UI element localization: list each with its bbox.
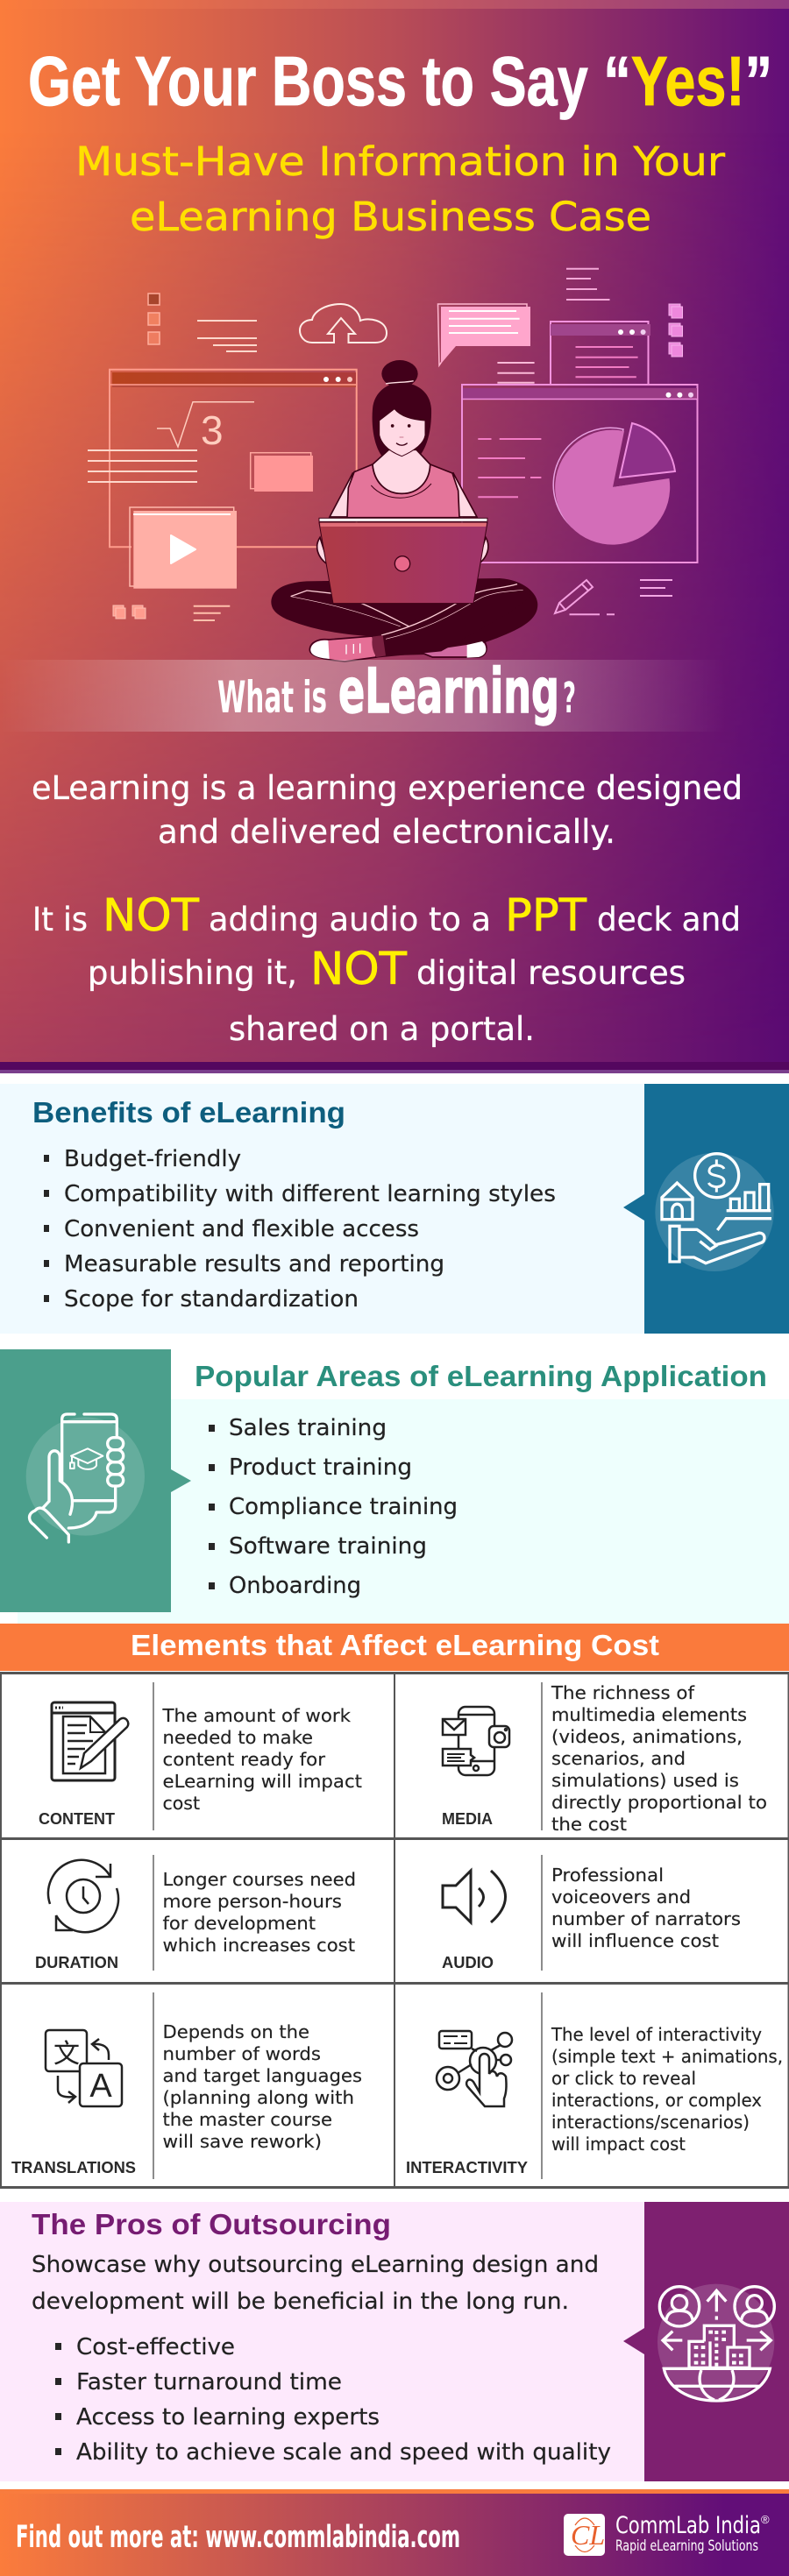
bullet list: Convenient and flexible access (64, 1216, 419, 1242)
cell: media: simulations) used is (551, 1770, 739, 1791)
icon: checklist squares (148, 294, 160, 344)
text block: definition: and delivered electronically. (158, 812, 615, 851)
cell: interactivity: The level of interactivity (551, 2024, 762, 2045)
math formula: square root of 3 (157, 402, 254, 453)
icon: speech bubble (438, 304, 530, 365)
text lines middle (497, 363, 535, 383)
math formula: square root of 3: 3 (201, 407, 224, 453)
cell: media (442, 1682, 767, 1835)
bullet list: Cost-effective (76, 2334, 235, 2360)
cell: translations: and target languages (163, 2065, 362, 2086)
face (380, 409, 425, 456)
subtitle: eLearning Business Case (130, 194, 651, 240)
subtitle: Must-Have Information in Your (75, 138, 726, 185)
text block: what eLearning is not: deck and (597, 900, 741, 938)
cost elements grid (0, 1672, 789, 2189)
illustration: woman with laptop and learning windows (88, 269, 698, 662)
icon: global offices and people (658, 2284, 774, 2401)
cell: audio: Professional (551, 1865, 664, 1886)
subtitle (75, 138, 726, 240)
cell: interactivity: or click to reveal (551, 2068, 696, 2089)
woman figure (271, 360, 537, 662)
text lines bottom left (194, 606, 230, 620)
cell: translations: will save rework) (163, 2131, 322, 2152)
bullet list: Software training (229, 1533, 427, 1560)
text block: what eLearning is not: NOT (310, 944, 408, 995)
bullet list: Product training (229, 1454, 412, 1481)
text lines left top (197, 321, 257, 351)
bullet list: Sales training (229, 1415, 387, 1441)
cell: translations: the master course (163, 2109, 332, 2130)
cell: media: (videos, animations, (551, 1726, 743, 1747)
bullet list (209, 1415, 458, 1599)
cell: audio: voiceovers and (551, 1886, 691, 1907)
icon: hand touching network (437, 2031, 512, 2106)
laptop (319, 518, 487, 604)
large window with pie chart (462, 385, 698, 563)
leg stripes (381, 584, 517, 635)
bullet list: Access to learning experts (76, 2404, 380, 2431)
paragraph (32, 2252, 599, 2315)
neck and chest (373, 449, 430, 493)
panel: popular areas of eLearning application (0, 1349, 789, 1624)
icon: language translation: A (89, 2068, 112, 2105)
icon: speaker (443, 1871, 505, 1922)
right foot (418, 641, 487, 658)
text lines bottom right (640, 580, 672, 596)
cell: translations: Depends on the (163, 2021, 309, 2042)
cell: media: MEDIA (442, 1810, 493, 1828)
cell: content: The amount of work (161, 1705, 351, 1726)
hair back (373, 360, 431, 457)
cell: media: directly proportional to (551, 1792, 767, 1813)
text block: what eLearning is not: NOT (103, 890, 200, 942)
icon: document and pencil (52, 1702, 128, 1780)
bullet list: Onboarding (229, 1573, 361, 1599)
heading band: What is eLearning?: What is (217, 672, 327, 723)
cell: interactivity (406, 2024, 783, 2176)
icon: clock with cycle arrows (48, 1860, 118, 1932)
icon: language translation (46, 2030, 122, 2106)
icon: hand holding phone with graduation cap (26, 1414, 145, 1542)
bullet list (55, 2334, 611, 2466)
bullet list: Ability to achieve scale and speed with quality (76, 2439, 611, 2466)
cell: content: CONTENT (39, 1810, 115, 1828)
logo: CommLab India: ® (761, 2513, 770, 2526)
logo: CommLab India: CL (571, 2519, 605, 2551)
left window (110, 370, 357, 547)
panel: the pros of outsourcing (0, 2202, 789, 2481)
heading: Popular Areas of eLearning Application (195, 1361, 767, 1393)
banner: elements that affect eLearning cost: Elements that Affect eLearning Cost (131, 1630, 659, 1662)
text lines above small window (566, 269, 610, 300)
heading band: What is eLearning?: eLearning (338, 655, 559, 727)
cell: audio (442, 1865, 741, 1971)
cell: translations (11, 2021, 362, 2176)
crossed leg (374, 584, 532, 658)
cell: content: cost (163, 1793, 200, 1814)
icon: language translation: 文 (53, 2032, 80, 2070)
arms (330, 472, 477, 517)
hero panel: gradient background (0, 0, 789, 1073)
cell: content: eLearning will impact (163, 1771, 362, 1792)
heading: Benefits of eLearning (32, 1097, 345, 1129)
pie chart (553, 423, 675, 545)
tank top (347, 464, 459, 518)
shoe (309, 635, 386, 662)
cell: interactivity: will impact cost (551, 2134, 686, 2155)
text block: what eLearning is not: publishing it, (88, 953, 297, 992)
text block: what eLearning is not: PPT (505, 890, 587, 942)
banner: elements that affect eLearning cost (0, 1624, 789, 1671)
text lines in left window (88, 450, 197, 482)
cell: content (39, 1702, 362, 1828)
bullet list: Budget-friendly (64, 1146, 241, 1172)
paragraph: Showcase why outsourcing eLearning design and (32, 2252, 599, 2278)
pink square (251, 453, 313, 492)
bullet list: Compliance training (229, 1494, 458, 1520)
small window (551, 322, 650, 385)
cell: content: content ready for (163, 1749, 326, 1770)
bullet list: Measurable results and reporting (64, 1251, 444, 1277)
icon: document stack (669, 304, 682, 357)
cell: interactivity: (simple text + animations, (551, 2046, 783, 2067)
icon: phone with media (443, 1707, 509, 1775)
cell: content: needed to make (163, 1727, 313, 1748)
cell: media: scenarios, and (551, 1748, 686, 1769)
icon: pencil (555, 580, 615, 614)
text block: what eLearning is not: digital resources (416, 953, 686, 992)
cell: translations: TRANSLATIONS (11, 2159, 136, 2176)
cell: interactivity: interactions, or complex (551, 2090, 762, 2111)
cell: audio: AUDIO (442, 1954, 494, 1971)
panel: benefits of eLearning (0, 1084, 789, 1334)
bullet list (44, 1146, 556, 1313)
text block: what eLearning is not: It is (32, 900, 88, 938)
cell: media: the cost (551, 1814, 627, 1835)
title: Get Your Boss to Say “Yes!” (28, 42, 772, 120)
cell: interactivity: INTERACTIVITY (406, 2159, 528, 2176)
icon: cloud upload (300, 304, 387, 343)
cell: translations: number of words (163, 2043, 321, 2064)
heading band: What is eLearning? (0, 655, 789, 732)
text block: what eLearning is not: shared on a portal. (229, 1009, 535, 1048)
cell: media: multimedia elements (551, 1704, 747, 1725)
cell: duration: which increases cost (163, 1935, 355, 1956)
cell: duration: DURATION (35, 1954, 118, 1971)
heading band: What is eLearning?: ? (563, 674, 576, 723)
cell: audio: number of narrators (551, 1908, 741, 1929)
bullet list: Scope for standardization (64, 1286, 359, 1313)
icon: hand holding money, house and chart (655, 1153, 774, 1271)
paragraph: development will be beneficial in the long run. (32, 2289, 569, 2315)
cell: duration: for development (163, 1913, 316, 1934)
text block: definition: eLearning is a learning experience designed (32, 768, 743, 807)
cell: duration: Longer courses need (163, 1869, 356, 1890)
cell: duration (35, 1860, 356, 1971)
footer (0, 2489, 789, 2576)
text block: what eLearning is not (32, 890, 741, 1048)
heading: The Pros of Outsourcing (32, 2209, 391, 2241)
bullet list: Compatibility with different learning styles (64, 1181, 556, 1207)
icon: small documents (113, 605, 146, 619)
icon: video player (130, 507, 237, 589)
cell: duration: more person-hours (163, 1891, 342, 1912)
cell: translations: (planning along with (163, 2087, 354, 2108)
pointer arrow (171, 1469, 191, 1492)
cell: interactivity: interactions/scenarios) (551, 2112, 750, 2133)
legs (271, 578, 537, 655)
cell: media: The richness of (551, 1682, 695, 1703)
text block: definition (32, 768, 743, 851)
cell: audio: will influence cost (551, 1930, 719, 1951)
pointer arrow (623, 1194, 644, 1221)
bullet list: Faster turnaround time (76, 2369, 342, 2396)
text block: what eLearning is not: adding audio to a (209, 900, 491, 938)
logo: CommLab India (564, 2512, 770, 2556)
pointer arrow (623, 2328, 644, 2354)
call to action: Find out more at: www.commlabindia.com (16, 2520, 460, 2555)
